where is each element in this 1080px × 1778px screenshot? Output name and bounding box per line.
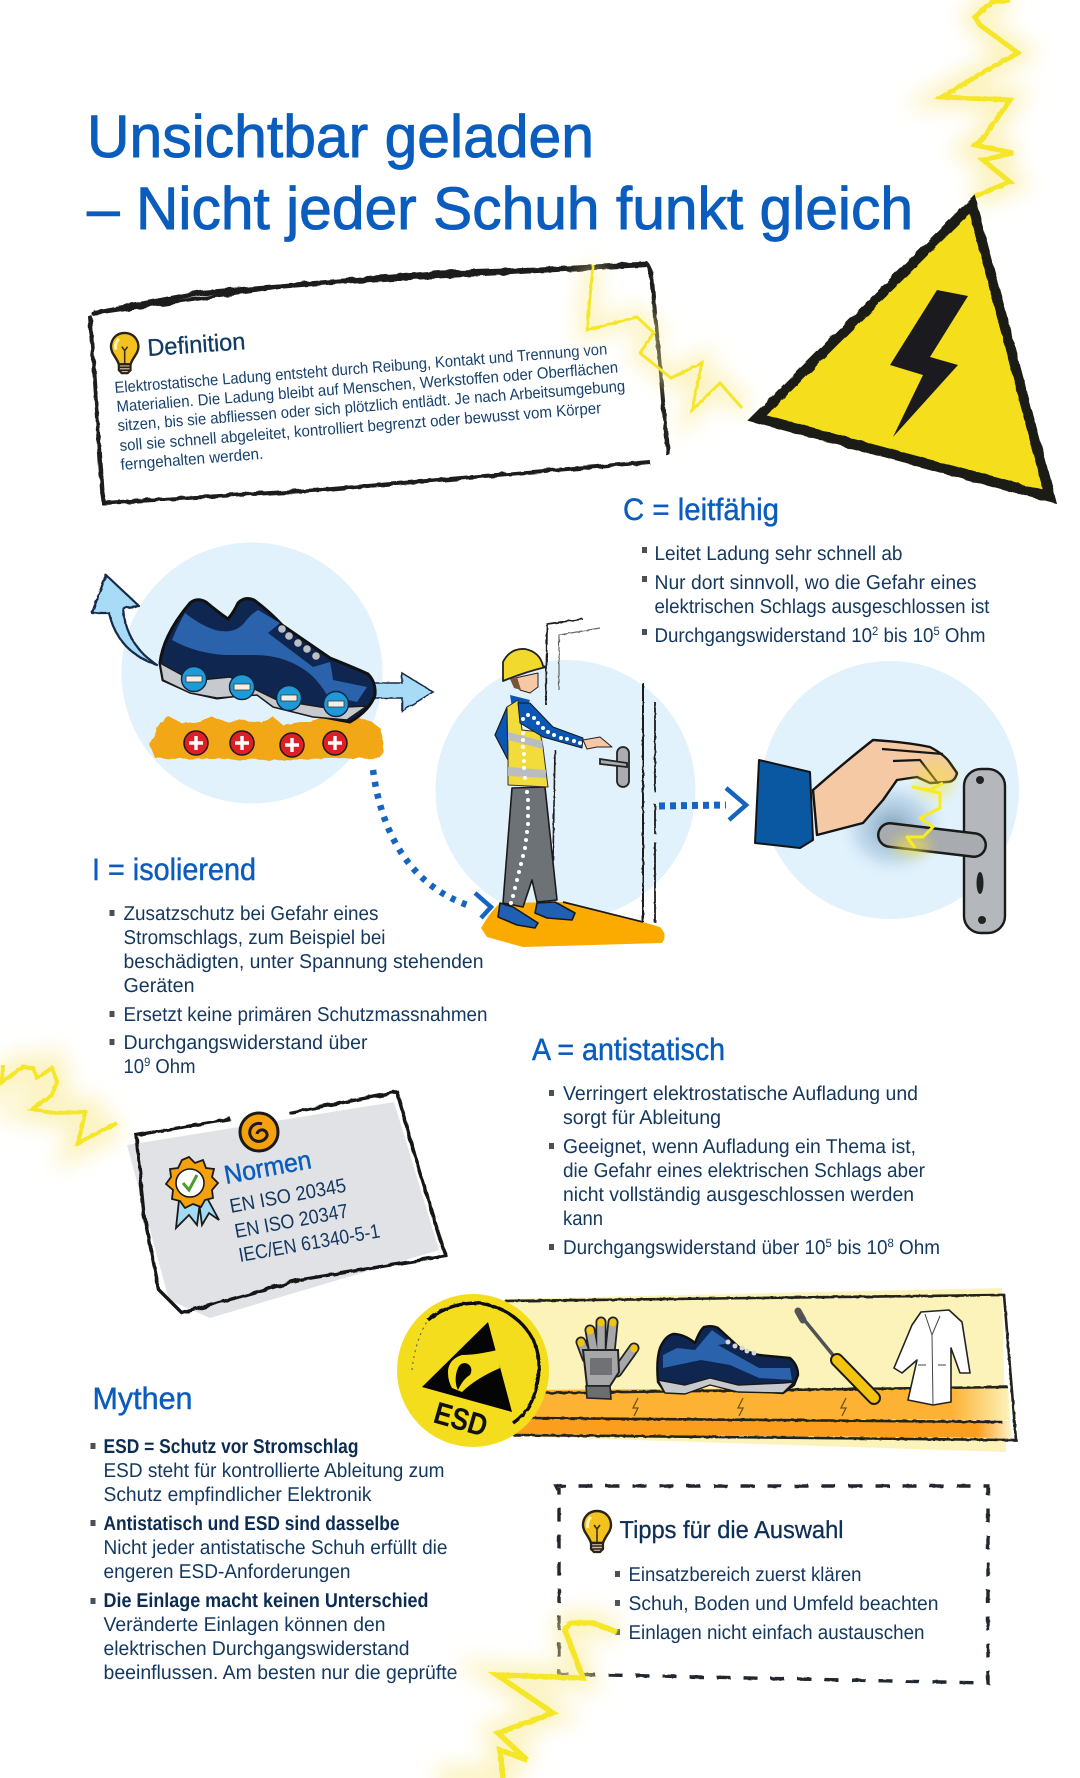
panel: definition	[90, 264, 668, 503]
icon: ESD badge: ESD	[430, 1395, 492, 1444]
list: Mythen: Veränderte Einlagen können den	[104, 1614, 386, 1636]
dotted arrow: from shoe to worker	[373, 770, 491, 918]
icon: screwdriver	[798, 1311, 874, 1398]
panel: Tipps für die Auswahl	[556, 1486, 988, 1683]
list: tips: Einlagen nicht einfach austauschen	[628, 1622, 924, 1644]
list: C leitfähig: bis 10	[878, 625, 933, 647]
list: I isolierend: Zusatzschutz bei Gefahr eines	[124, 903, 378, 925]
dashed border	[556, 1486, 988, 1683]
icon: light bulb	[111, 333, 138, 373]
list: C leitfähig: elektrischen Schlags ausgeschlossen ist	[654, 596, 990, 618]
heading: I = isolierend: I = isolierend	[92, 852, 256, 887]
icon: ESD badge	[397, 1294, 549, 1447]
icon: award badge	[166, 1157, 219, 1228]
list: A antistatisch: kann	[563, 1208, 603, 1230]
door handle	[600, 747, 629, 787]
title: Unsichtbar geladen	[87, 103, 594, 170]
list: Mythen	[90, 1436, 458, 1684]
heading: Tipps: Tipps für die Auswahl	[620, 1517, 844, 1544]
list: standards: EN ISO 20347	[233, 1200, 350, 1243]
list: Mythen: ESD steht für kontrollierte Ableitung zum	[104, 1460, 444, 1482]
box top stroke	[94, 264, 648, 313]
list: standards	[228, 1175, 382, 1267]
list: I isolierend: 9	[144, 1055, 151, 1069]
panel: Normen note	[127, 1092, 446, 1318]
lightning: bottom	[437, 1623, 617, 1778]
list: tips	[615, 1564, 938, 1644]
text: definition: Elektrostatische Ladung entsteht durch Reibung, Kontakt und Trennung von	[114, 341, 608, 397]
note fill	[127, 1102, 439, 1318]
list: I isolierend: Ohm	[150, 1056, 196, 1078]
list: C leitfähig: 2	[872, 624, 879, 638]
icon: tilted safety shoe with negative charges	[160, 599, 375, 722]
text: definition: Materialien. Die Ladung bleibt auf Menschen, Werkstoffen oder Oberflächen	[116, 360, 619, 416]
floor under worker	[481, 902, 665, 947]
heading: definition: Definition	[147, 328, 246, 362]
title: – Nicht jeder Schuh funkt gleich	[87, 175, 913, 242]
list: A antistatisch: 8	[887, 1236, 894, 1250]
band background	[505, 1288, 1006, 1452]
list: Mythen: Antistatisch und ESD sind dasselbe	[104, 1513, 400, 1535]
illustration: hand touching door handle with spark	[755, 740, 1005, 933]
ground with positive charges	[150, 716, 384, 760]
list: A antistatisch: sorgt für Ableitung	[563, 1107, 721, 1129]
list: C leitfähig: Nur dort sinnvoll, wo die Gefahr eines	[654, 572, 976, 594]
heading: A = antistatisch: A = antistatisch	[532, 1032, 725, 1067]
floor	[520, 1387, 1010, 1420]
list: standards: IEC/EN 61340-5-1	[237, 1220, 382, 1267]
list: A antistatisch: Durchgangswiderstand über 10	[563, 1237, 841, 1259]
list: A antistatisch: die Gefahr eines elektrischen Schlags aber	[563, 1160, 925, 1182]
text: definition: sitzen, bis sie abfliessen oder sich plötzlich entlädt. Je nach Arbeitsumgebung	[117, 378, 626, 435]
list: Mythen: Nicht jeder antistatische Schuh erfüllt die	[104, 1537, 448, 1559]
list: A antistatisch: Verringert elektrostatische Aufladung und	[563, 1083, 918, 1105]
list: A antistatisch	[549, 1083, 940, 1259]
icon: ESD shoe	[657, 1326, 798, 1394]
heading: Mythen: Mythen	[92, 1381, 192, 1416]
list: I isolierend: Ersetzt keine primären Schutzmassnahmen	[124, 1004, 488, 1026]
arrow: shoe lifting up	[92, 575, 157, 665]
list: Mythen: ESD = Schutz vor Stromschlag	[104, 1436, 358, 1458]
list: C leitfähig: Leitet Ladung sehr schnell ab	[654, 543, 902, 565]
worker figure	[495, 649, 612, 928]
list: I isolierend: beschädigten, unter Spannung stehenden	[124, 951, 484, 973]
list: I isolierend	[110, 903, 488, 1078]
list: C leitfähig: Ohm	[940, 625, 986, 647]
heading: Normen: Normen	[222, 1144, 314, 1190]
list: Mythen: Schutz empfindlicher Elektronik	[104, 1484, 372, 1506]
text: definition: soll sie schnell abgeleitet, kontrolliert begrenzt oder bewusst vom Körper	[119, 400, 602, 455]
title	[87, 103, 913, 242]
list: I isolierend: Durchgangswiderstand über	[124, 1032, 368, 1054]
illustration circle: hand	[761, 661, 1019, 919]
list: A antistatisch: Geeignet, wenn Aufladung ein Thema ist,	[563, 1136, 916, 1158]
icon: orange pin	[240, 1113, 278, 1151]
panel: ESD protected items band	[505, 1288, 1016, 1452]
list: I isolierend: 10	[124, 1056, 146, 1078]
icon: glove	[581, 1322, 634, 1399]
arrow: shoe moving right	[375, 673, 433, 711]
icon: lab coat	[894, 1310, 970, 1405]
list: tips: Einsatzbereich zuerst klären	[628, 1564, 862, 1586]
illustration circle: worker	[436, 660, 696, 920]
lightning: top right	[942, 0, 1018, 197]
list: C leitfähig	[642, 543, 990, 647]
icon: small sparks	[633, 1398, 846, 1416]
list: Mythen: Die Einlage macht keinen Unterschied	[104, 1590, 428, 1612]
list: Mythen: engeren ESD-Anforderungen	[104, 1561, 350, 1583]
text: definition	[114, 341, 626, 474]
list: A antistatisch: 5	[826, 1236, 832, 1250]
door	[546, 619, 655, 923]
list: Mythen: beeinflussen. Am besten nur die geprüfte	[104, 1662, 458, 1684]
icon: high voltage warning triangle	[757, 204, 1050, 497]
lightning: left edge	[2, 1065, 117, 1143]
list: C leitfähig: 5	[933, 624, 940, 638]
note outline	[136, 1092, 446, 1313]
box outline	[90, 265, 668, 503]
dotted arrow: worker to hand	[659, 788, 746, 820]
heading: C = leitfähig: C = leitfähig	[623, 492, 779, 527]
list: A antistatisch: nicht vollständig ausgeschlossen werden	[563, 1184, 914, 1206]
icon: light bulb	[583, 1511, 611, 1552]
list: C leitfähig: Durchgangswiderstand 10	[654, 625, 887, 647]
list: A antistatisch: Ohm	[894, 1237, 940, 1259]
list: I isolierend: Geräten	[124, 975, 194, 997]
text: definition: ferngehalten werden.	[120, 446, 264, 474]
list: Mythen: elektrischen Durchgangswiderstand	[104, 1638, 410, 1660]
illustration circle: shoe	[122, 542, 382, 804]
list: A antistatisch: bis 10	[832, 1237, 887, 1259]
lightning: definition to triangle	[587, 265, 745, 410]
band outlines	[505, 1295, 1016, 1440]
list: I isolierend: Stromschlags, zum Beispiel bei	[124, 927, 386, 949]
list: standards: EN ISO 20345	[228, 1175, 348, 1218]
list: tips: Schuh, Boden und Umfeld beachten	[628, 1593, 938, 1615]
